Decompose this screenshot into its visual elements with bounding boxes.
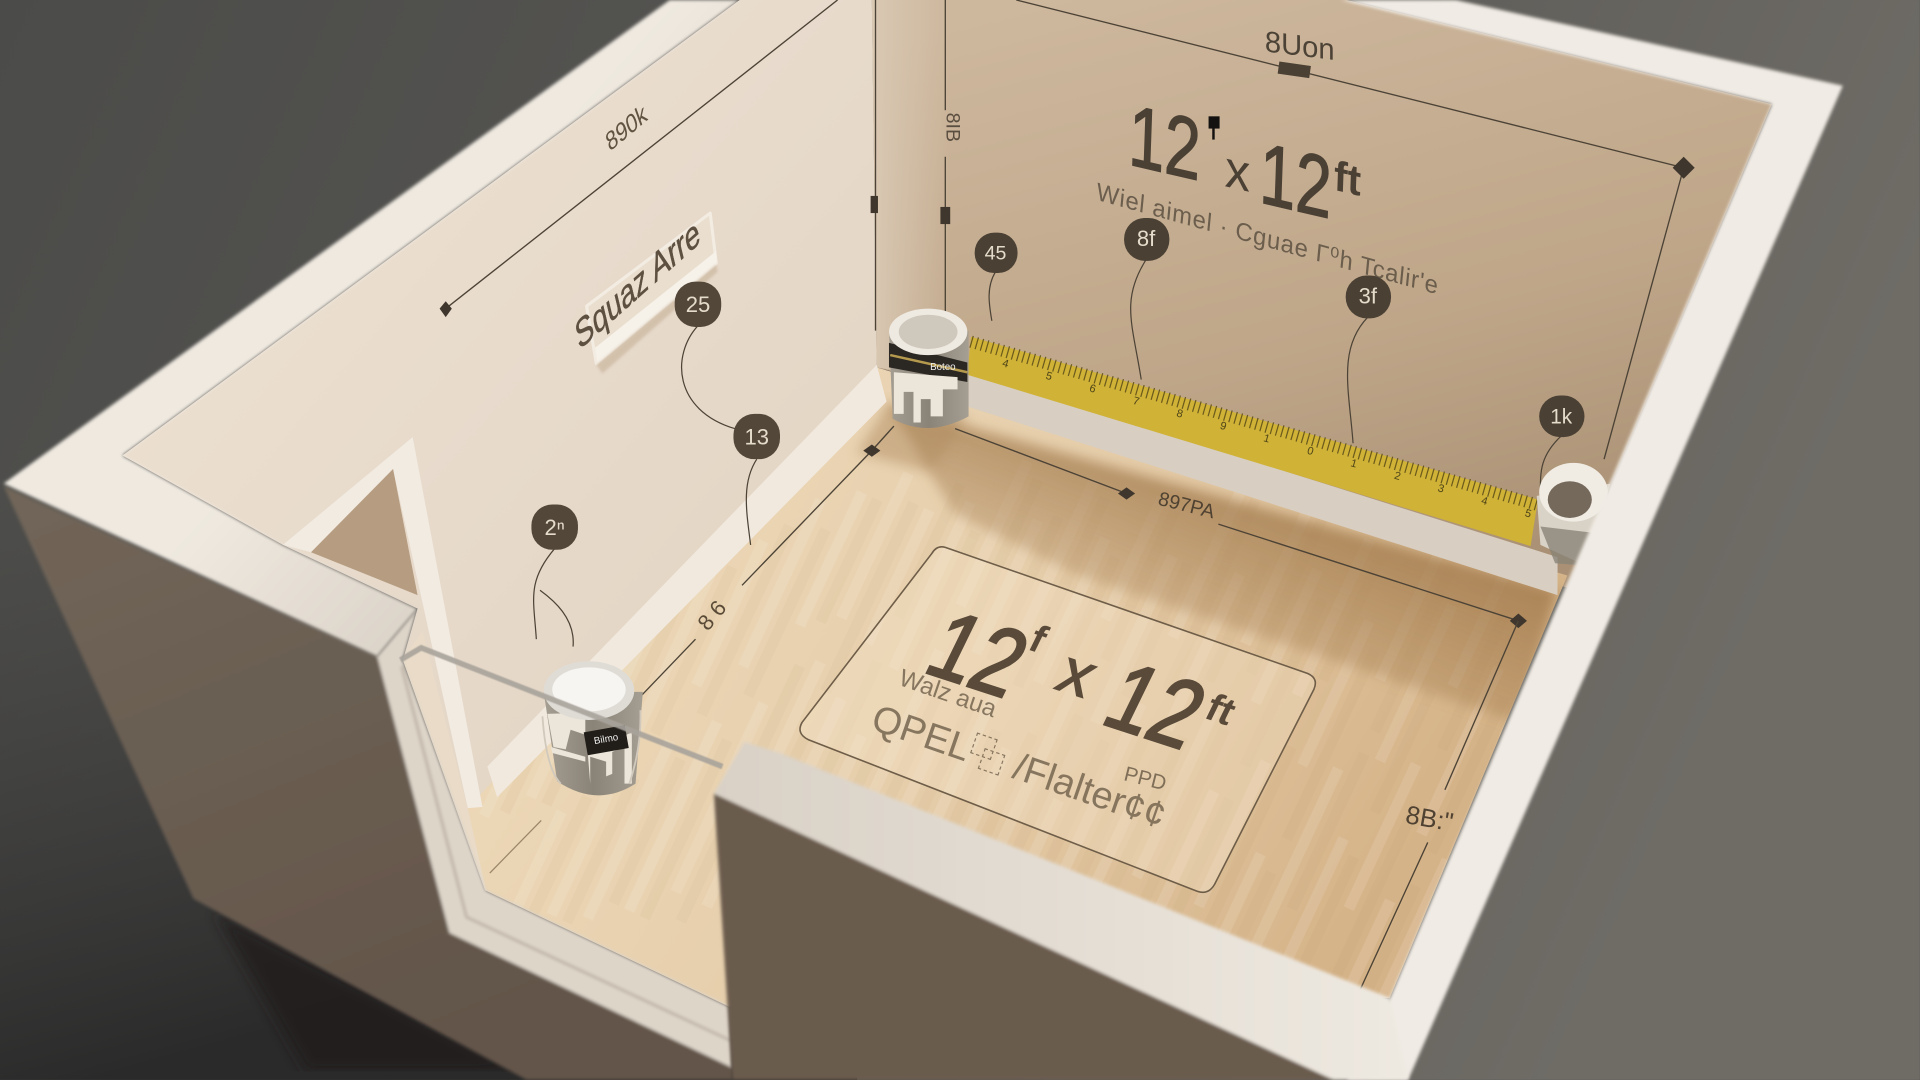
front wall: left section	[4, 486, 732, 1080]
badge 45: 45	[985, 243, 1007, 265]
back and right rim of room	[1341, 0, 1843, 1080]
badge 25: 25	[686, 292, 710, 317]
badge 1k: 1k	[1550, 406, 1573, 429]
floor panel: 12 x 12 ft: f	[1022, 617, 1055, 661]
floor panel: 12 x 12 ft: x	[1047, 636, 1109, 711]
back wall dimension lines: 8Uon	[1265, 25, 1335, 67]
floor dimension lines	[490, 426, 1527, 992]
back wall	[872, 0, 1772, 588]
door opening	[283, 437, 486, 890]
badge 2	[531, 504, 578, 647]
wall headline: 12 x 12 ft	[1127, 87, 1362, 238]
floor panel: 12 x 12 ft: Walz aua	[896, 665, 1000, 723]
wall headline: 12 x 12 ft: ft	[1333, 151, 1362, 205]
paint can: back corner: Boteo	[930, 362, 956, 373]
wall headline: 12 x 12 ft: 12	[1127, 87, 1202, 200]
callout badges with leader lines	[531, 218, 1584, 647]
left and front-left rim of room	[4, 0, 740, 656]
paint can: front: Bilmo	[593, 732, 620, 747]
back baseboard	[967, 371, 1558, 595]
badge 45	[975, 233, 1018, 321]
tape measure: 4567891012345	[1001, 357, 1533, 521]
door frame	[377, 609, 732, 1068]
left baseboard	[487, 365, 887, 797]
badge 2: 2ⁿ	[545, 515, 565, 540]
paint can: back corner	[889, 309, 969, 428]
floor	[468, 367, 1567, 1007]
wall dimension line: left wall	[440, 0, 838, 317]
floor dimension lines: 8B:"	[1403, 801, 1455, 837]
wall headline: 12 x 12 ft: 12	[1258, 125, 1333, 238]
floor panel: 12 x 12 ft: 12	[1089, 643, 1222, 770]
wall headline: 12 x 12 ft: x	[1224, 140, 1251, 204]
wall dimension line: left wall: 890k	[602, 98, 651, 158]
paint can: back right	[1537, 463, 1610, 566]
badge 8f	[1124, 218, 1169, 380]
glass rail	[400, 648, 722, 767]
floor panel: 12 x 12 ft: ft	[1198, 686, 1243, 734]
floor panel: 12 x 12 ft: 12	[911, 592, 1044, 718]
front wall: right section	[714, 742, 1408, 1080]
badge 1k	[1539, 396, 1584, 490]
badge 8f: 8f	[1137, 226, 1156, 251]
left wall	[122, 0, 877, 890]
floor dimension lines: 8 6	[692, 596, 731, 635]
wall plaque: Square Area: Squaz Arre	[572, 210, 704, 358]
back wall dimension lines	[871, 0, 1695, 459]
floor dimension lines: 897PA	[1156, 488, 1218, 523]
badge 3f: 3f	[1359, 284, 1378, 309]
back wall dimension lines: 8IB	[942, 113, 964, 142]
badge 13	[733, 414, 780, 545]
badge 25	[675, 282, 735, 429]
wall caption: Wiel aimel · Cguae Γ⁰h Tcalir'e	[1095, 179, 1440, 300]
floor panel: 12 x 12 ft: QPEL⿻ /Flalter¢¢	[866, 697, 1171, 837]
wood planks	[554, 472, 1504, 996]
badge 3f	[1346, 276, 1391, 443]
badge 13: 13	[744, 424, 769, 449]
paint can: front	[542, 661, 643, 795]
floor panel: 12 x 12 ft	[800, 547, 1315, 892]
floor panel: 12 x 12 ft: PPD	[1122, 763, 1169, 795]
